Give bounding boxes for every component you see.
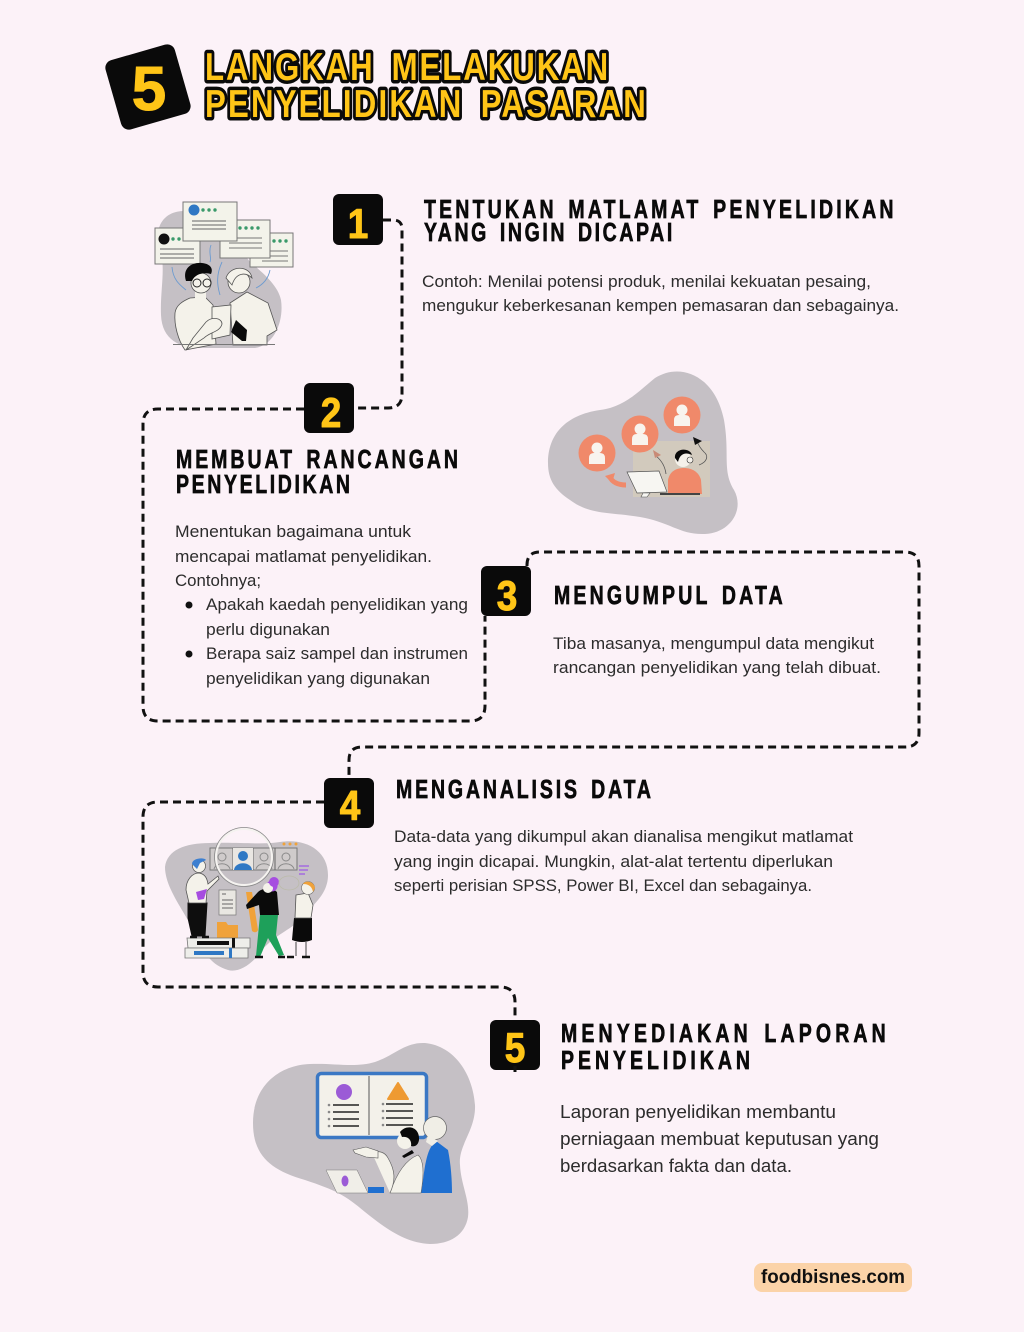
step 4 text bbox=[394, 827, 853, 895]
step 2 badge bbox=[304, 383, 354, 437]
step 3 text bbox=[553, 634, 881, 677]
step 5 badge: 5 bbox=[505, 1025, 525, 1072]
step 5 heading bbox=[561, 1018, 886, 1075]
dashed connector path bbox=[143, 220, 919, 1020]
step 1 text: Contoh: Menilai potensi produk, menilai kekuatan pesaing, bbox=[422, 272, 871, 291]
step 2 text: mencapai matlamat penyelidikan. bbox=[175, 547, 432, 566]
step 2 text: Apakah kaedah penyelidikan yang bbox=[206, 595, 468, 614]
step 4 badge bbox=[324, 778, 374, 830]
step 1 text: mengukur keberkesanan kempen pemasaran dan sebagainya. bbox=[422, 296, 899, 315]
website label bbox=[754, 1263, 912, 1292]
step 4 text: seperti perisian SPSS, Power BI, Excel dan sebagainya. bbox=[394, 876, 812, 895]
step 1 badge: 1 bbox=[348, 201, 368, 248]
step 2 text: penyelidikan yang digunakan bbox=[206, 669, 430, 688]
step 1 heading bbox=[424, 194, 894, 247]
title badge 5: 5 bbox=[132, 55, 166, 124]
step 5 text bbox=[560, 1101, 879, 1176]
step 3 text: Tiba masanya, mengumpul data mengikut bbox=[553, 634, 874, 653]
step 2 illustration: agent at computer with customer icons bbox=[548, 371, 738, 534]
title block bbox=[103, 42, 646, 132]
step 4 text: yang ingin dicapai. Mungkin, alat-alat tertentu diperlukan bbox=[394, 852, 833, 871]
step 2 text bbox=[175, 522, 468, 688]
step 5 illustration: presenters at report board bbox=[253, 1043, 475, 1244]
step 5 heading: MENYEDIAKAN LAPORAN bbox=[561, 1018, 886, 1048]
step 5 text: berdasarkan fakta dan data. bbox=[560, 1155, 792, 1176]
website label: foodbisnes.com bbox=[761, 1267, 905, 1288]
step 2 heading bbox=[176, 444, 458, 499]
step 2 text: Contohnya; bbox=[175, 571, 261, 590]
title text: PENYELIDIKAN PASARAN bbox=[205, 83, 646, 126]
step 5 text: perniagaan membuat keputusan yang bbox=[560, 1128, 879, 1149]
step 2 text: Menentukan bagaimana untuk bbox=[175, 522, 412, 541]
step 5 badge bbox=[490, 1020, 540, 1072]
step 3 text: rancangan penyelidikan yang telah dibuat. bbox=[553, 658, 881, 677]
step 3 heading: MENGUMPUL DATA bbox=[554, 580, 783, 610]
step 3 badge bbox=[481, 566, 531, 620]
step 4 badge: 4 bbox=[340, 783, 360, 830]
step 1 badge bbox=[333, 194, 383, 248]
title text bbox=[205, 46, 646, 126]
step 1 text bbox=[422, 272, 899, 315]
step 5 heading: PENYELIDIKAN bbox=[561, 1045, 750, 1075]
step 3 badge: 3 bbox=[497, 573, 517, 620]
step 2 heading: MEMBUAT RANCANGAN bbox=[176, 444, 458, 474]
step 4 heading: MENGANALISIS DATA bbox=[396, 774, 651, 804]
step 2 text: Berapa saiz sampel dan instrumen bbox=[206, 644, 468, 663]
step 5 text: Laporan penyelidikan membantu bbox=[560, 1101, 836, 1122]
step 1 heading: TENTUKAN MATLAMAT PENYELIDIKAN bbox=[424, 194, 894, 224]
step 1 illustration: two people reading reviews bbox=[155, 202, 293, 350]
title text: LANGKAH MELAKUKAN bbox=[205, 46, 608, 89]
step 2 heading: PENYELIDIKAN bbox=[176, 469, 350, 499]
step 1 heading: YANG INGIN DICAPAI bbox=[424, 217, 672, 247]
step 2 text: perlu digunakan bbox=[206, 620, 330, 639]
step 4 text: Data-data yang dikumpul akan dianalisa mengikut matlamat bbox=[394, 827, 853, 846]
title badge 5 bbox=[103, 42, 193, 132]
step 4 illustration: team analysing profiles with magnifier bbox=[165, 828, 328, 971]
step 2 badge: 2 bbox=[321, 390, 341, 437]
